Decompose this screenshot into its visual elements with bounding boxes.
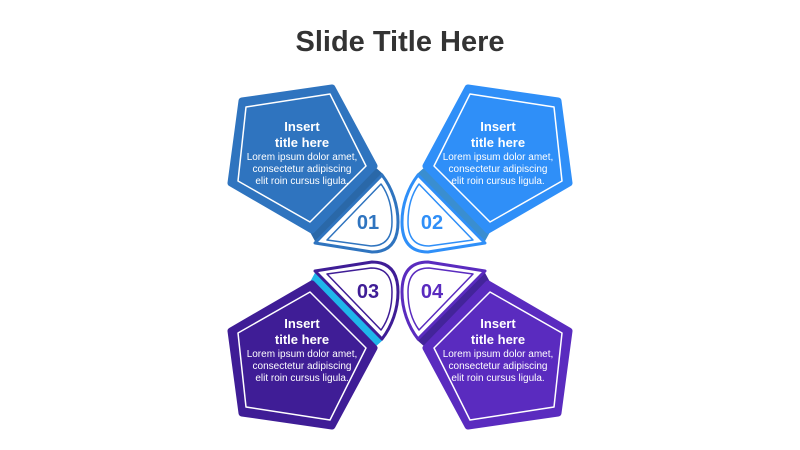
text 02: Lorem ipsum dolor amet, [443,152,553,163]
text 02: elit roin cursus ligula. [451,176,545,187]
text 04: title here [471,332,525,347]
pentagon 04 [426,284,569,426]
text 02: consectetur adipiscing [449,164,547,175]
text 01: consectetur adipiscing [253,164,351,175]
text 03: Lorem ipsum dolor amet, [247,349,357,360]
text 02 [443,119,553,187]
teardrop 02 [402,175,485,252]
connector 01 [310,166,383,243]
title: Slide Title Here [296,26,504,58]
text 01: Insert [284,119,320,134]
numbers [357,212,444,303]
numbers: 03 [357,281,379,303]
item 02 [402,88,569,252]
pentagon 01 [231,88,374,230]
numbers: 02 [421,212,443,234]
text 04: Lorem ipsum dolor amet, [443,349,553,360]
text 02: Insert [480,119,516,134]
pentagon 03 [231,284,374,426]
numbers: 04 [421,281,444,303]
connector 04 [417,271,490,348]
text 03 [247,316,357,384]
text 03: consectetur adipiscing [253,361,351,372]
text 01: elit roin cursus ligula. [255,176,349,187]
pentagon 02 [426,88,569,230]
text 04 [443,316,553,384]
text 03: Insert [284,316,320,331]
connector 03 [310,271,383,348]
teardrop 04 [402,262,485,339]
text 02: title here [471,135,525,150]
teardrop 01 [315,175,398,252]
numbers: 01 [357,212,379,234]
text 04: elit roin cursus ligula. [451,373,545,384]
text 03: elit roin cursus ligula. [255,373,349,384]
item 01 [231,88,398,252]
text 01: title here [275,135,329,150]
text 03: title here [275,332,329,347]
item 03 [231,262,398,426]
text 04: consectetur adipiscing [449,361,547,372]
connector 02 [417,166,490,243]
text 01: Lorem ipsum dolor amet, [247,152,357,163]
item 04 [402,262,569,426]
teardrop 03 [315,262,398,339]
text 04: Insert [480,316,516,331]
text 01 [247,119,357,187]
